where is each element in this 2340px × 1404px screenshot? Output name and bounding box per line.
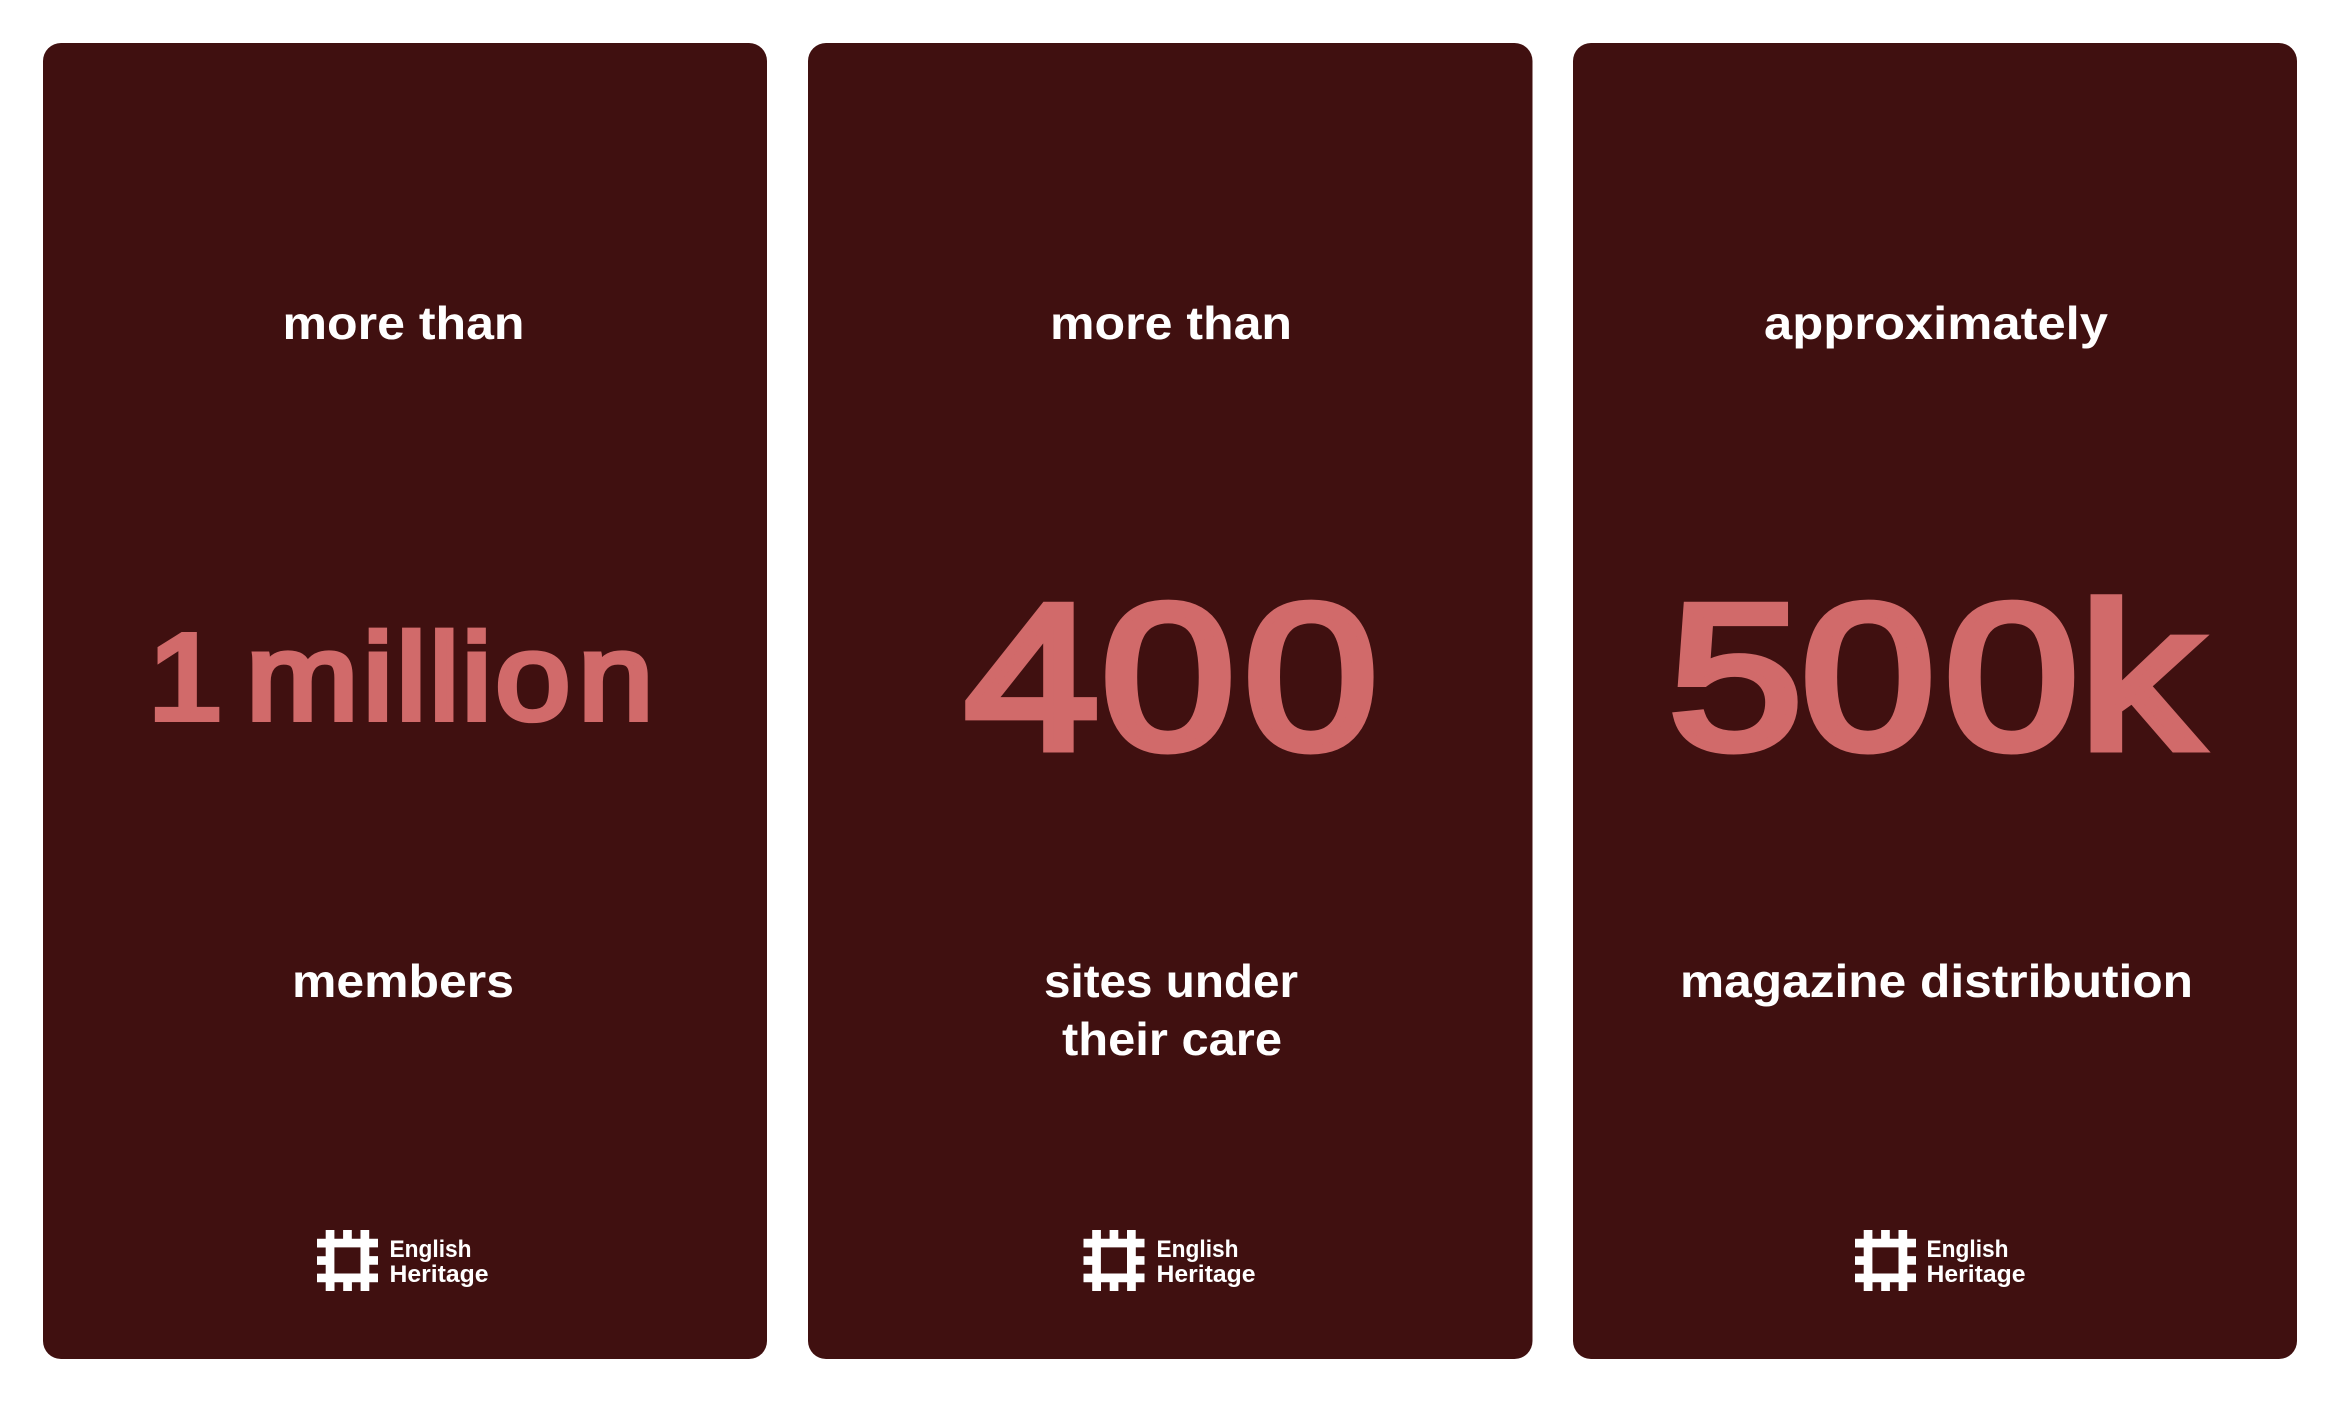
logo: English Heritage: English bbox=[1926, 1236, 2008, 1263]
logo: English Heritage: Heritage bbox=[390, 1261, 488, 1288]
big number: 1 million: 1 million bbox=[148, 610, 653, 746]
caption: sites under their care: their care bbox=[1062, 1013, 1282, 1065]
logo: English Heritage: Heritage bbox=[1156, 1261, 1256, 1288]
caption: sites under their care: sites under bbox=[1044, 955, 1298, 1007]
caption: members: members bbox=[292, 955, 514, 1007]
big number: 400: 400 bbox=[965, 562, 1378, 792]
logo: English Heritage: Heritage bbox=[1926, 1261, 2026, 1288]
logo: English Heritage bbox=[317, 1230, 488, 1291]
logo: English Heritage: English bbox=[390, 1236, 472, 1263]
big number: 500k: 500k bbox=[1669, 562, 2201, 792]
panel: magazine bbox=[1573, 43, 2297, 1359]
logo: English Heritage bbox=[1084, 1230, 1256, 1291]
lead-in text: approximately: approximately bbox=[1764, 297, 2108, 349]
logo: English Heritage: English bbox=[1156, 1236, 1238, 1263]
panel: members bbox=[43, 43, 767, 1359]
logo: English Heritage bbox=[1855, 1230, 2026, 1291]
caption: sites under their care bbox=[1044, 955, 1298, 1065]
panel: sites bbox=[808, 43, 1532, 1359]
caption: magazine distribution: magazine distribution bbox=[1680, 955, 2193, 1007]
lead-in text: more than: more than bbox=[282, 297, 524, 349]
lead-in text: more than: more than bbox=[1050, 297, 1292, 349]
